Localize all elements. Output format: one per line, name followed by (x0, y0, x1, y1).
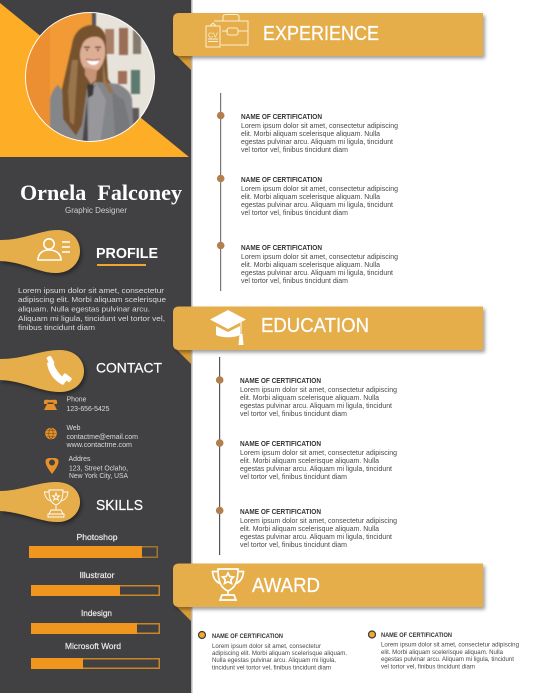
experience item 3: Lorem ipsum dolor sit amet, consectetur adipiscing (241, 252, 398, 261)
education item 2: egestas pulvinar arcu. Aliquam mi ligula, tincidunt (240, 464, 393, 473)
education item 1: elit. Morbi aliquam scelerisque aliquam. Nulla (240, 393, 380, 402)
web details: Web (66, 423, 80, 432)
icon: graduation cap (210, 310, 246, 345)
experience item 3: NAME OF CERTIFICATION (241, 245, 322, 252)
banner: experience (173, 13, 483, 70)
experience item 1: vel tortor vel, finibus tincidunt diam (241, 145, 348, 154)
panel: sidebar background (0, 0, 192, 693)
experience item 1: Lorem ipsum dolor sit amet, consectetur adipiscing (241, 121, 398, 130)
experience item 2: Lorem ipsum dolor sit amet, consectetur adipiscing (241, 184, 398, 193)
experience item 3: egestas pulvinar arcu. Aliquam mi ligula, tincidunt (241, 268, 394, 277)
education item 2 (240, 441, 397, 481)
contact heading: CONTACT (96, 360, 162, 376)
skill: Microsoft Word (31, 641, 159, 669)
award item 2: vel tortor vel, finibus tincidunt diam (381, 664, 475, 670)
hair back (61, 24, 112, 136)
education item 3: elit. Morbi aliquam scelerisque aliquam. Nulla (240, 524, 380, 533)
experience item 2: NAME OF CERTIFICATION (241, 177, 322, 184)
profile text: aliquam. Nulla egestas pulvinar arcu. (18, 304, 150, 314)
yellow triangle behind portrait (0, 3, 189, 157)
award item 1: Lorem ipsum dolor sit amet, consectetur (212, 643, 322, 650)
contact tab (0, 350, 84, 392)
icon: person (38, 239, 70, 260)
icon: cv and briefcase (206, 14, 248, 47)
name: Ornela Falconey (20, 180, 182, 205)
experience item 1: egestas pulvinar arcu. Aliquam mi ligula, tincidunt (241, 137, 394, 146)
education item 2: elit. Morbi aliquam scelerisque aliquam. Nulla (240, 456, 380, 465)
experience item 2: elit. Morbi aliquam scelerisque aliquam. Nulla (241, 192, 381, 201)
web details: contactme@email.com (66, 432, 138, 441)
icon: trophy (44, 490, 68, 517)
experience item 3: elit. Morbi aliquam scelerisque aliquam. Nulla (241, 260, 381, 269)
education item 1: vel tortor vel, finibus tincidunt diam (240, 409, 347, 418)
banner: experience: CV (208, 32, 218, 40)
profile text (18, 286, 166, 332)
education item 1 (240, 378, 397, 418)
award item 1: NAME OF CERTIFICATION (212, 633, 283, 640)
face (80, 37, 105, 73)
experience heading: EXPERIENCE (263, 23, 379, 45)
education timeline (216, 357, 224, 555)
address details: New York City, USA (69, 471, 128, 480)
award item 2: egestas pulvinar arcu. Aliquam mi ligula, tincidunt (381, 656, 514, 663)
education item 3: vel tortor vel, finibus tincidunt diam (240, 540, 347, 549)
education item 3: egestas pulvinar arcu. Aliquam mi ligula, tincidunt (240, 532, 393, 541)
education item 3: NAME OF CERTIFICATION (240, 509, 321, 516)
experience item 1: elit. Morbi aliquam scelerisque aliquam. Nulla (241, 129, 381, 138)
award item 1 (198, 632, 347, 672)
address details (68, 454, 128, 480)
icon: location pin (46, 458, 58, 474)
award item 1: adipiscing elit. Morbi aliquam scelerisque aliquam. (212, 650, 347, 657)
skill: Photoshop: Photoshop (76, 532, 118, 542)
phone details: 123-656-5425 (66, 404, 110, 413)
banner: award (173, 564, 483, 621)
skill: Indesign (31, 608, 159, 634)
skill: Illustrator: Illustrator (80, 570, 115, 580)
profile text: Aliquam mi ligula, tincidunt vel tortor vel, (18, 314, 165, 323)
profile text: Lorem ipsum dolor sit amet, consectetur (18, 286, 165, 295)
address details: Addres (68, 454, 91, 463)
web details (66, 423, 138, 449)
education item 1: NAME OF CERTIFICATION (240, 378, 321, 385)
icon: trophy (212, 569, 244, 600)
experience item 1 (241, 114, 398, 154)
experience item 2: egestas pulvinar arcu. Aliquam mi ligula, tincidunt (241, 200, 394, 209)
education heading: EDUCATION (261, 315, 369, 337)
education item 3 (240, 509, 397, 549)
phone details (66, 394, 110, 413)
education item 1: Lorem ipsum dolor sit amet, consectetur adipiscing (240, 385, 397, 394)
experience item 2: vel tortor vel, finibus tincidunt diam (241, 208, 348, 217)
profile text: adipiscing elit. Morbi aliquam scelerisque (18, 295, 166, 304)
award item 1: Nulla egestas pulvinar arcu. Aliquam mi ligula, (212, 657, 336, 664)
address details: 123, Street Oclaho, (69, 464, 128, 472)
skill: Photoshop (29, 532, 157, 558)
education item 3: Lorem ipsum dolor sit amet, consectetur adipiscing (240, 516, 397, 525)
web details: www.contactme.com (66, 440, 132, 449)
education item 2: NAME OF CERTIFICATION (240, 441, 321, 448)
experience timeline (217, 93, 224, 291)
experience item 2 (241, 177, 398, 217)
skills heading: SKILLS (96, 498, 143, 514)
education item 1: egestas pulvinar arcu. Aliquam mi ligula, tincidunt (240, 401, 393, 410)
experience item 1: NAME OF CERTIFICATION (241, 114, 322, 121)
hair streaks (68, 60, 78, 125)
award item 2: NAME OF CERTIFICATION (381, 632, 452, 639)
icon: telephone (44, 400, 57, 410)
skill: Microsoft Word: Microsoft Word (65, 641, 121, 651)
experience item 3 (241, 245, 398, 285)
banner: education (173, 306, 483, 364)
award item 2: elit. Morbi aliquam scelerisque aliquam. Nulla (381, 649, 503, 656)
icon: phone (46, 355, 72, 385)
jacket (50, 82, 134, 145)
skill: Indesign: Indesign (81, 608, 112, 618)
profile text: finibus tincidunt diam (18, 323, 95, 332)
education item 2: vel tortor vel, finibus tincidunt diam (240, 472, 347, 481)
portrait photo (25, 12, 157, 145)
award item 2: Lorem ipsum dolor sit amet, consectetur adipiscing (381, 642, 519, 648)
profile tab (0, 230, 80, 273)
skills tab (0, 482, 80, 522)
profile heading: PROFILE (96, 246, 158, 262)
skill: Illustrator (31, 570, 159, 596)
job title: Graphic Designer (65, 206, 127, 215)
phone details: Phone (66, 394, 86, 404)
award item 2 (368, 631, 519, 670)
award heading: AWARD (252, 575, 320, 597)
experience item 3: vel tortor vel, finibus tincidunt diam (241, 276, 348, 285)
education item 2: Lorem ipsum dolor sit amet, consectetur adipiscing (240, 448, 397, 457)
icon: globe (46, 428, 56, 439)
award item 1: tincidunt vel tortor vel, finibus tincidunt diam (212, 664, 331, 672)
